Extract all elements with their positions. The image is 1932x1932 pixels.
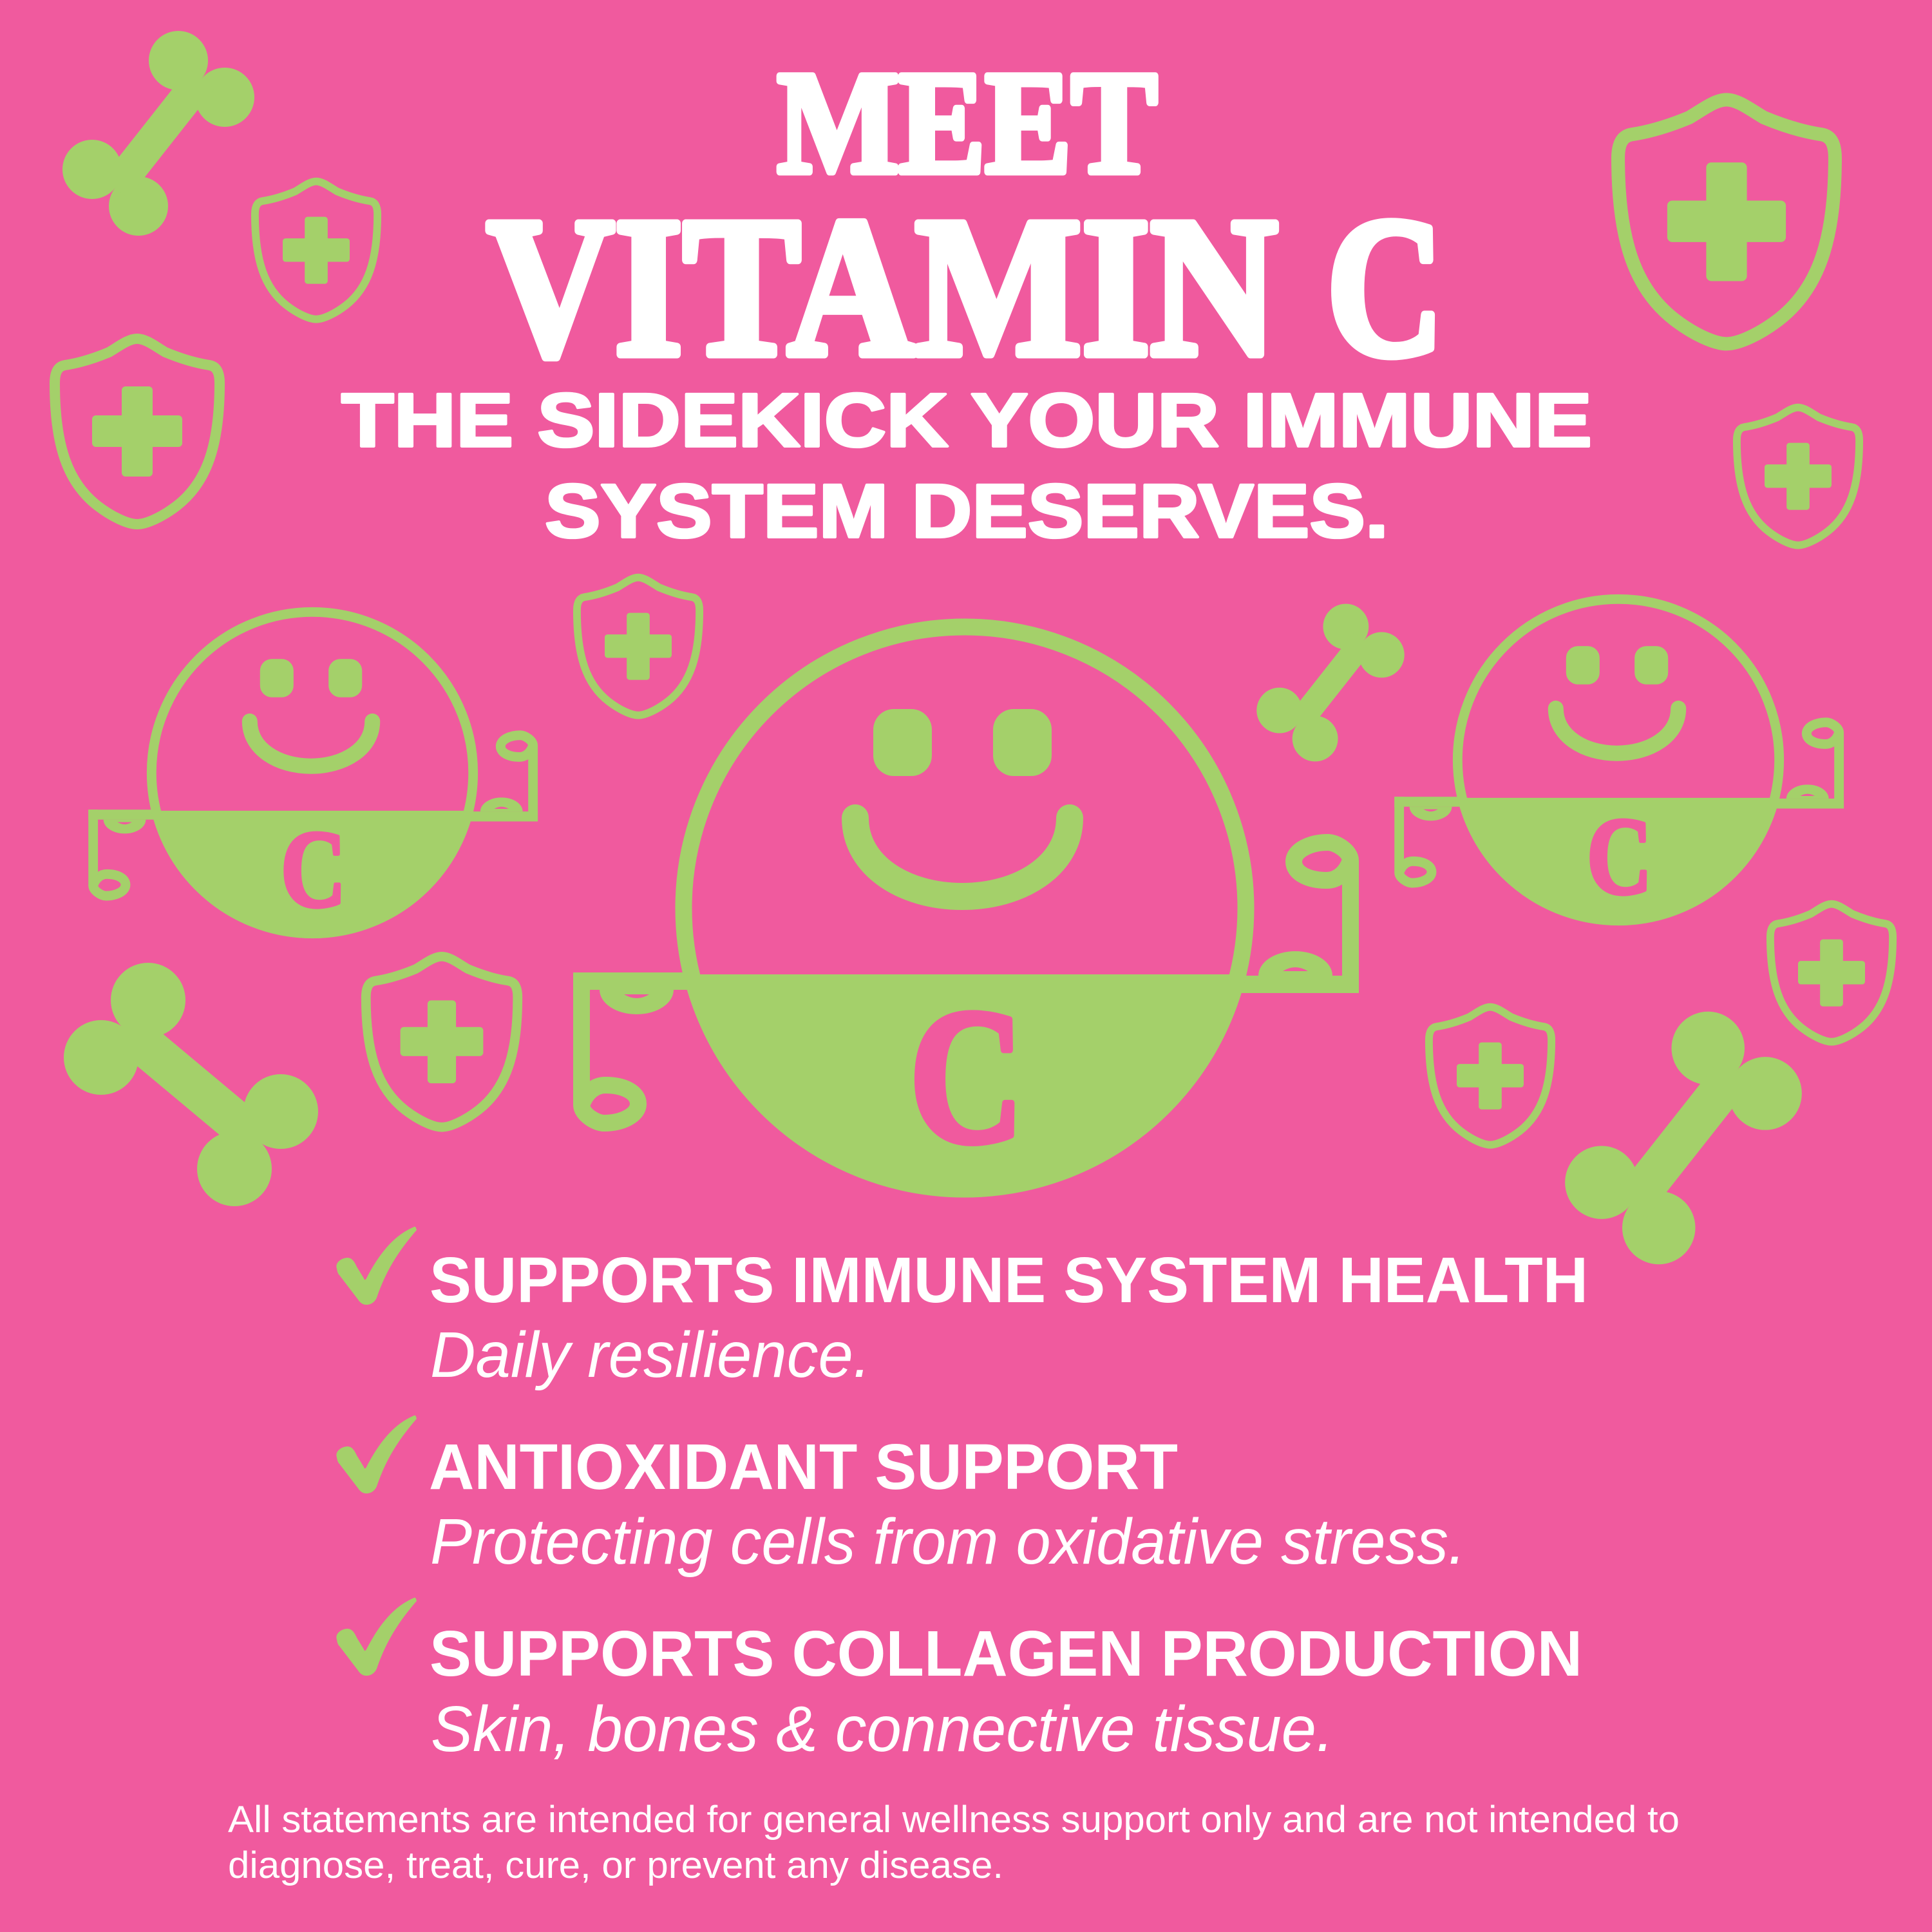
- disclaimer: [228, 1799, 1680, 1886]
- title: vitamin c: VITAMIN: [487, 177, 1278, 398]
- icon: shield large left: [55, 339, 220, 524]
- icon: shield lower centre right: [1429, 1007, 1551, 1145]
- icon: bone top left: [62, 31, 254, 236]
- subtitle: SYSTEM DESERVES.: [545, 469, 1388, 554]
- heading: collagen: SUPPORTS COLLAGEN PRODUCTION: [430, 1618, 1582, 1690]
- character: left smiling vitamin c: [88, 612, 538, 938]
- benefit 1: [336, 1227, 1588, 1391]
- text: daily resilience: Daily resilience.: [430, 1319, 871, 1391]
- heading: antioxidant: ANTIOXIDANT SUPPORT: [429, 1431, 1178, 1503]
- subtitle: [341, 378, 1592, 554]
- character: right smiling vitamin c: [1394, 599, 1844, 925]
- icon: bone centre right: [1256, 604, 1405, 761]
- text: oxidative stress: Protecting cells from oxidative stress.: [430, 1506, 1466, 1578]
- character: left smiling vitamin c: C: [281, 808, 346, 931]
- benefit 3: [336, 1598, 1582, 1765]
- icon: bone lower left: [64, 963, 318, 1206]
- icon: bone lower right: [1565, 1012, 1802, 1264]
- icon: check 3: [336, 1598, 417, 1676]
- icon: check 2: [336, 1416, 417, 1493]
- icon: check 1: [336, 1227, 417, 1305]
- character: large smiling vitamin c: C: [909, 969, 1024, 1183]
- icon: shield centre: [577, 578, 699, 715]
- title: vitamin c: C: [1327, 177, 1444, 398]
- heading: immune: SUPPORTS IMMUNE SYSTEM HEALTH: [430, 1244, 1588, 1316]
- icon: shield large top right: [1618, 100, 1835, 344]
- icon: shield small top left: [255, 182, 377, 319]
- icon: shield lower left: [366, 956, 518, 1127]
- character: large smiling vitamin c: [573, 627, 1359, 1197]
- disclaimer: All statements are intended for general wellness support only and are not intended to: [228, 1799, 1680, 1841]
- benefit 2: [336, 1416, 1466, 1578]
- disclaimer: diagnose, treat, cure, or prevent any disease.: [228, 1844, 1003, 1886]
- subtitle: THE SIDEKICK YOUR IMMUNE: [341, 378, 1592, 463]
- icon: shield right: [1737, 408, 1859, 545]
- character: right smiling vitamin c: C: [1587, 795, 1653, 918]
- text: connective tissue: Skin, bones & connective tissue.: [431, 1693, 1334, 1765]
- icon: shield lower right: [1770, 904, 1893, 1042]
- title: meet: MEET: [777, 42, 1157, 204]
